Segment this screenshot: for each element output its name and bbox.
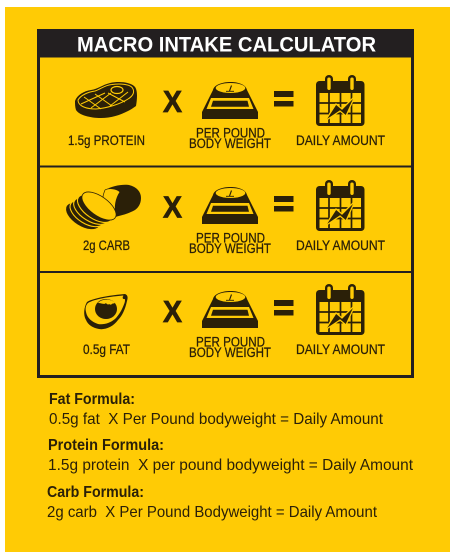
icon: calendar <box>316 75 364 126</box>
text block: carb formula <box>47 484 378 521</box>
icon: scale <box>202 187 258 224</box>
row: carb <box>62 180 385 256</box>
label: daily amount: DAILY AMOUNT <box>296 342 385 357</box>
multiply sign: X <box>163 294 182 329</box>
multiply sign: X <box>163 190 182 224</box>
label: per pound body weight: PER POUND <box>196 230 265 246</box>
icon: steak <box>75 82 137 118</box>
text block: protein formula <box>48 437 414 474</box>
icon: calendar <box>316 284 364 335</box>
label: 2g carb: 2g CARB <box>83 238 130 253</box>
label: 0.5g fat: 0.5g FAT <box>83 342 130 357</box>
multiply sign: X <box>163 84 182 119</box>
label: per pound body weight: PER POUND <box>196 334 265 350</box>
row: protein <box>68 75 385 151</box>
label: per pound body weight: BODY WEIGHT <box>189 345 271 360</box>
text block: protein formula: Protein Formula: <box>48 437 164 454</box>
icon: avocado <box>84 294 128 329</box>
equals sign <box>274 196 294 212</box>
equals sign <box>274 300 294 316</box>
label: per pound body weight <box>189 334 271 360</box>
label: per pound body weight: BODY WEIGHT <box>189 136 271 151</box>
label: per pound body weight: PER POUND <box>196 126 265 140</box>
label: per pound body weight <box>189 126 271 151</box>
text block: carb formula: 2g carb X Per Pound Bodyweight = Daily Amount <box>47 504 378 521</box>
icon: calendar <box>316 180 364 231</box>
title bar: MACRO INTAKE CALCULATOR <box>77 32 376 56</box>
label: daily amount: DAILY AMOUNT <box>296 133 385 148</box>
row: fat <box>83 284 385 360</box>
icon: scale <box>202 82 258 119</box>
label: per pound body weight <box>189 230 271 256</box>
icon: bread <box>62 185 141 235</box>
calculator frame <box>38 30 413 376</box>
text block: carb formula: Carb Formula: <box>47 484 144 501</box>
icon: scale <box>202 291 258 328</box>
text block: protein formula: 1.5g protein X per pound bodyweight = Daily Amount <box>48 457 414 474</box>
label: 1.5g protein: 1.5g PROTEIN <box>68 133 145 148</box>
equals sign <box>274 91 294 106</box>
label: daily amount: DAILY AMOUNT <box>296 238 385 253</box>
text block: fat formula <box>49 391 384 428</box>
text block: fat formula: Fat Formula: <box>49 391 135 408</box>
label: per pound body weight: BODY WEIGHT <box>189 241 271 256</box>
text block: fat formula: 0.5g fat X Per Pound bodyweight = Daily Amount <box>49 411 384 428</box>
